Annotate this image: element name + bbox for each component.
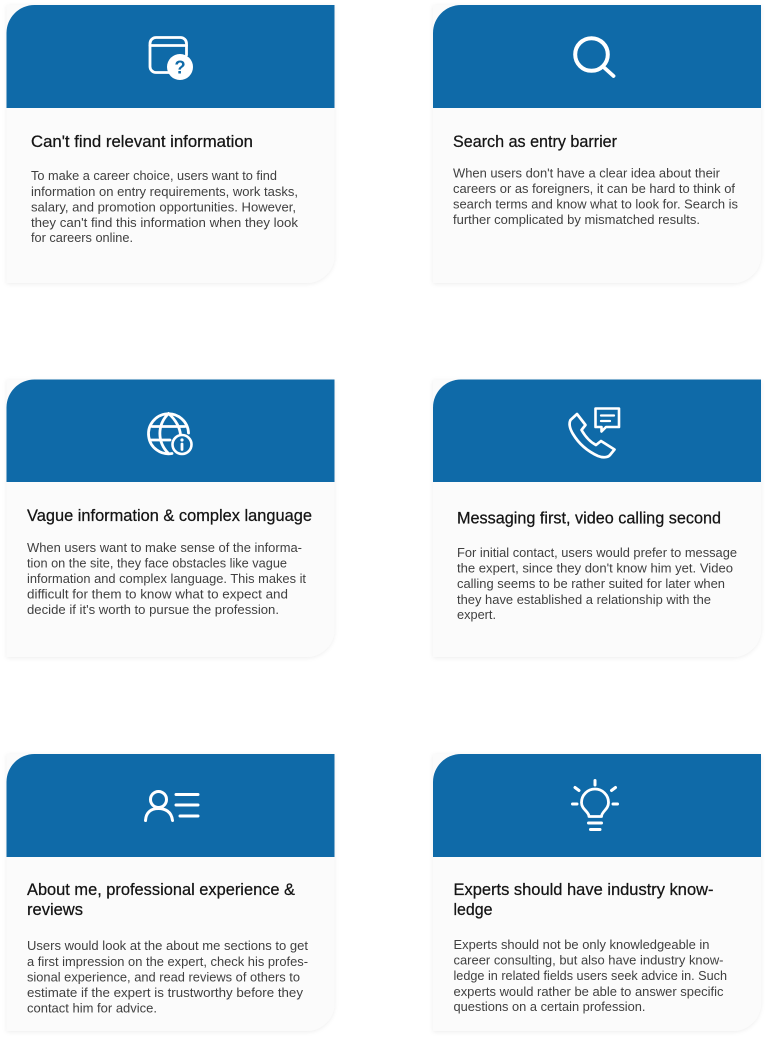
body text: estimate if the expert is trustworthy before they xyxy=(27,985,304,1000)
body text xyxy=(31,168,299,245)
panel: vague information and complex language xyxy=(6,380,334,657)
body text: tion on the site, they face obstacles like vague xyxy=(27,556,287,570)
header band xyxy=(433,754,761,857)
heading: About me, professional experience & xyxy=(27,881,295,899)
heading xyxy=(454,881,714,919)
body text xyxy=(27,938,308,1016)
header band xyxy=(6,380,334,482)
body text xyxy=(457,545,737,622)
header band xyxy=(433,5,761,108)
body text: search terms and know what to look for. Search is xyxy=(453,196,738,212)
body text: decide if it's worth to pursue the profession. xyxy=(27,602,279,617)
body text: experts would rather be able to answer specific xyxy=(454,984,724,999)
body text: careers or as foreigners, it can be hard to think of xyxy=(453,181,735,196)
icon: browser window with question mark xyxy=(150,38,193,80)
body text: questions on a certain profession. xyxy=(454,999,646,1014)
icon: magnifying glass xyxy=(575,38,614,76)
body text: For initial contact, users would prefer to message xyxy=(457,545,737,560)
icon: person with list lines xyxy=(146,792,198,820)
heading: reviews xyxy=(27,901,83,919)
body text: calling seems to be rather suited for later when xyxy=(457,576,725,591)
body text: salary, and promotion opportunities. However, xyxy=(31,200,296,214)
body text: expert. xyxy=(457,607,496,622)
body text: When users don't have a clear idea about their xyxy=(453,166,721,180)
heading: Search as entry barrier xyxy=(453,133,617,151)
panel: about me, professional experience and reviews xyxy=(6,754,334,1031)
body text: for careers online. xyxy=(31,230,133,245)
body text: career consulting, but also have industry know- xyxy=(454,952,724,968)
body text xyxy=(454,937,727,1014)
icon: globe with info badge xyxy=(149,414,192,454)
panel: messaging first, video calling second xyxy=(433,380,761,657)
body text: contact him for advice. xyxy=(27,1000,157,1016)
body text: they have established a relationship with the xyxy=(457,592,711,607)
body text: ledge in related fields users seek advice in. Such xyxy=(454,968,727,983)
body text: Users would look at the about me sections to get xyxy=(27,938,308,953)
panel: search as entry barrier xyxy=(433,5,761,283)
header band xyxy=(6,5,334,108)
body text: difficult for them to know what to expect and xyxy=(27,586,288,602)
body text xyxy=(453,166,738,227)
heading: Can't find relevant information xyxy=(31,133,253,151)
heading: Messaging first, video calling second xyxy=(457,510,721,528)
heading: Experts should have industry know- xyxy=(454,881,714,899)
body text xyxy=(27,540,306,617)
heading: Vague information & complex language xyxy=(27,507,312,525)
body text: the expert, since they don't know him yet. Video xyxy=(457,560,733,576)
icon: phone with message bubble xyxy=(570,408,619,457)
panel: can't find relevant information xyxy=(6,5,334,283)
body text: further complicated by mismatched results. xyxy=(453,212,700,227)
heading: ledge xyxy=(454,901,492,919)
body text: When users want to make sense of the informa- xyxy=(27,540,302,555)
icon: browser window with question mark: ? xyxy=(174,56,186,78)
body text: a first impression on the expert, check his profes- xyxy=(27,954,308,969)
header band xyxy=(433,380,761,482)
body text: sional experience, and read reviews of others to xyxy=(27,970,300,984)
panel: experts should have industry knowledge xyxy=(433,754,761,1031)
icon: light bulb xyxy=(572,780,618,830)
body text: information and complex language. This makes it xyxy=(27,571,306,586)
body text: To make a career choice, users want to find xyxy=(31,168,277,183)
body text: Experts should not be only knowledgeable in xyxy=(454,937,710,952)
body text: information on entry requirements, work tasks, xyxy=(31,184,298,199)
header band xyxy=(6,754,334,857)
body text: they can't find this information when they look xyxy=(31,215,299,230)
heading xyxy=(27,881,295,919)
